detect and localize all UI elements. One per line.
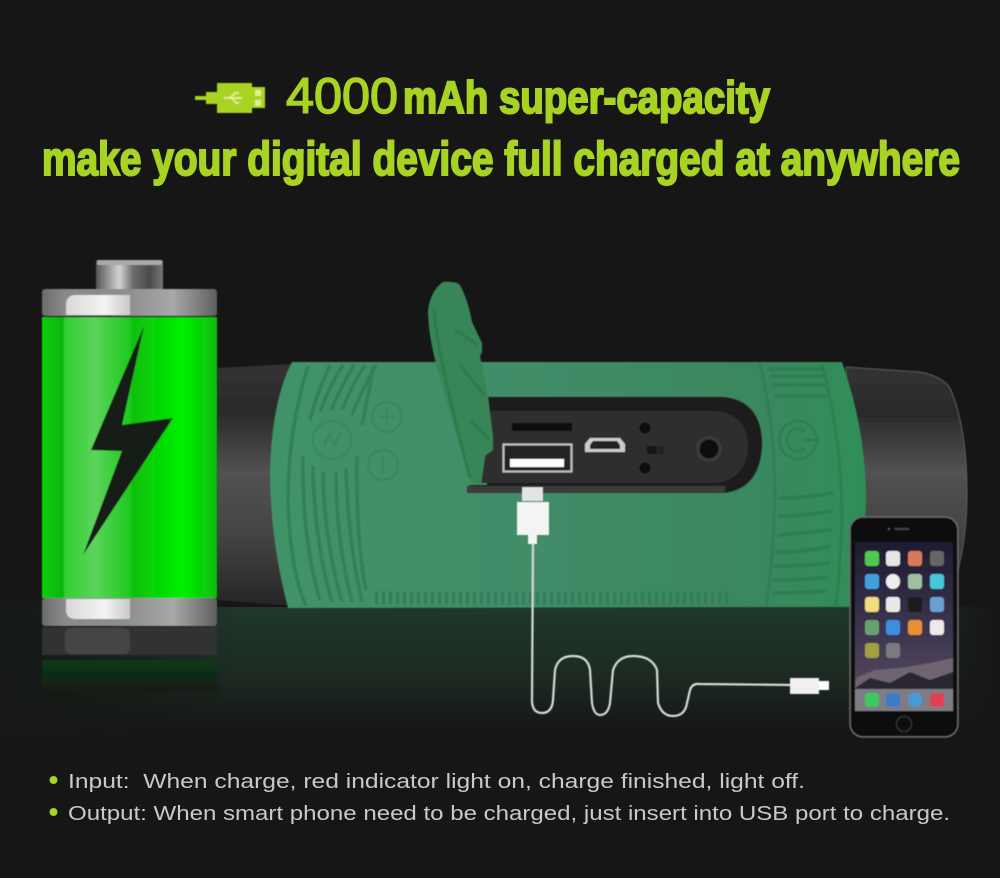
M button <box>313 421 351 459</box>
rubber lid <box>428 282 493 485</box>
USB cable <box>517 487 829 716</box>
plus button <box>372 402 402 432</box>
speaker: green body <box>270 362 866 608</box>
bullet: input: Input: When charge, red indicator light on, charge finished, light off. <box>68 771 805 793</box>
connector: USB-A <box>517 487 549 544</box>
connector: lightning <box>790 678 829 694</box>
speaker: left black end <box>217 364 292 606</box>
USB port <box>504 444 572 472</box>
right band <box>760 364 842 606</box>
SD card slot <box>512 423 572 431</box>
phone screen <box>855 542 953 711</box>
speaker: right black end <box>846 367 967 600</box>
lightning bolt <box>83 326 173 555</box>
left ridges <box>288 365 376 606</box>
port panel <box>467 397 762 493</box>
title line 1: 4000 <box>286 68 398 124</box>
title line 1: mAh super-capacity <box>403 72 770 123</box>
bottom texture <box>375 592 730 604</box>
minus button <box>368 450 398 480</box>
audio jack <box>696 436 722 462</box>
battery <box>42 260 217 626</box>
power symbol <box>779 421 819 459</box>
top metal band <box>42 289 217 316</box>
app icons <box>865 551 944 707</box>
bullet: output: Output: When smart phone need to be charged, just insert into USB port to charge. <box>68 803 950 825</box>
micro USB port <box>585 438 625 452</box>
LED holes <box>640 422 650 434</box>
bottom metal band <box>42 598 217 626</box>
switch <box>647 446 664 454</box>
battery terminal <box>96 260 163 290</box>
battery reflection <box>42 627 217 692</box>
home button <box>896 716 912 732</box>
smartphone <box>850 517 958 737</box>
title line 1 <box>286 68 770 124</box>
green charge <box>42 317 217 598</box>
icon: USB plug <box>195 83 265 113</box>
